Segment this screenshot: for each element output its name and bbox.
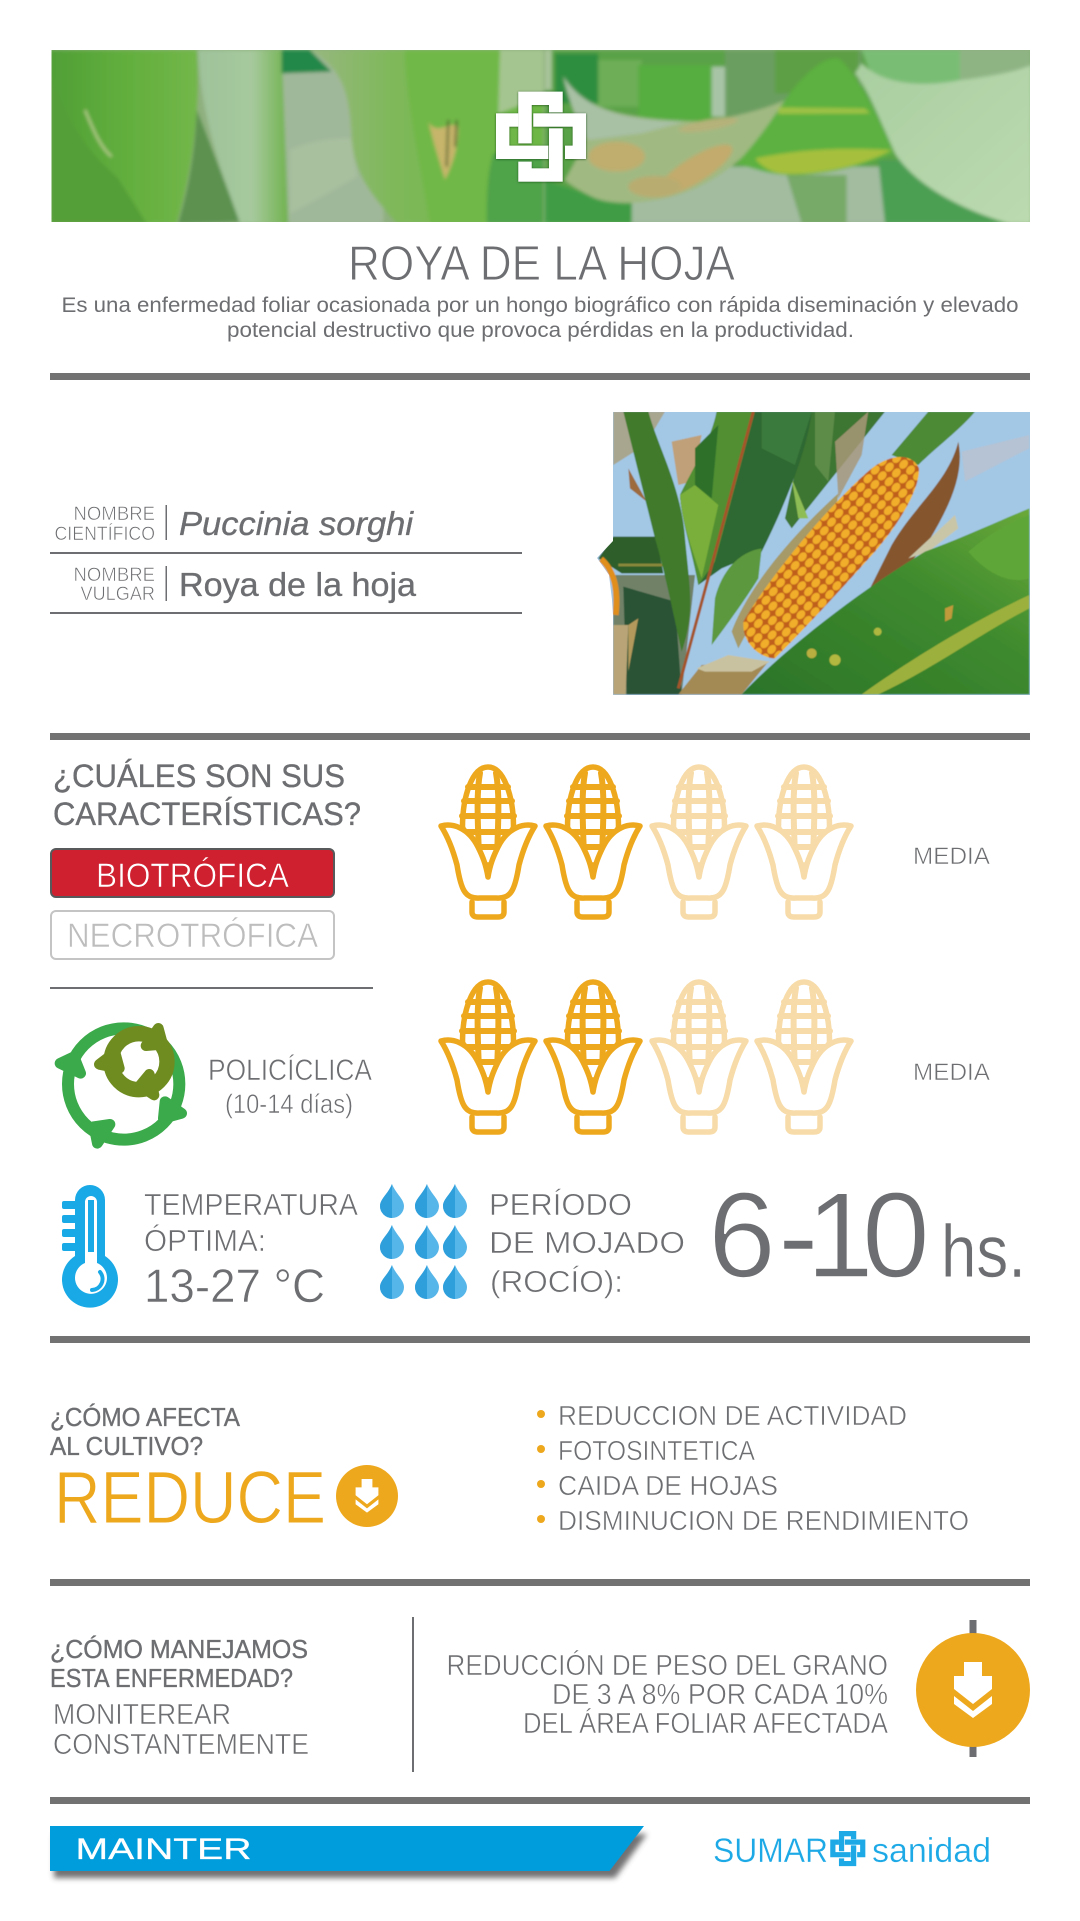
text: optimum temperature bbox=[144, 1187, 358, 1312]
logo: white interlocked knot bbox=[496, 92, 586, 182]
text: wetting period: DE MOJADO bbox=[489, 1225, 685, 1260]
tag: biotrophic (active): BIOTRÓFICA bbox=[96, 857, 289, 895]
heading: crop effect bbox=[50, 1402, 241, 1461]
heading: characteristics: CARACTERÍSTICAS? bbox=[53, 796, 361, 832]
heading: crop effect: ¿CÓMO AFECTA bbox=[50, 1402, 241, 1432]
heading: characteristics bbox=[53, 758, 361, 832]
text: grain weight loss: REDUCCIÓN DE PESO DEL GRANO bbox=[446, 1649, 888, 1682]
label: polycyclic: (10-14 días) bbox=[225, 1089, 353, 1119]
list: effects: CAIDA DE HOJAS bbox=[558, 1470, 778, 1501]
scientific name: NOMBRE bbox=[74, 504, 155, 525]
panel: characteristics bbox=[50, 758, 990, 1143]
icon: thermometer bbox=[62, 1185, 118, 1308]
footer: sumar sanidad brand bbox=[713, 1831, 991, 1870]
text: optimum temperature: TEMPERATURA bbox=[144, 1187, 358, 1222]
list: effects: DISMINUCION DE RENDIMIENTO bbox=[558, 1505, 969, 1536]
intro paragraph bbox=[62, 294, 1018, 342]
heading: management: ESTA ENFERMEDAD? bbox=[50, 1663, 293, 1693]
text: grain weight loss bbox=[446, 1649, 889, 1740]
big number: 6-10 hs: hs. bbox=[941, 1210, 1026, 1293]
intro paragraph: Es una enfermedad foliar ocasionada por un hongo biográfico con rápida diseminación y elevado bbox=[62, 294, 1018, 317]
footer: sumar sanidad brand: SUMAR bbox=[713, 1832, 828, 1870]
common name: NOMBRE bbox=[74, 565, 155, 586]
text: wetting period: (ROCÍO): bbox=[490, 1264, 623, 1299]
label: rating medium, second row: MEDIA bbox=[913, 1059, 990, 1086]
label: rating medium, first row: MEDIA bbox=[913, 843, 990, 870]
scientific name: CIENTÍFICO bbox=[54, 524, 155, 545]
icon: polycyclic cycle bbox=[60, 1028, 182, 1143]
label: polycyclic: POLICÍCLICA bbox=[208, 1054, 372, 1087]
label: polycyclic bbox=[208, 1054, 372, 1119]
heading: management bbox=[50, 1634, 308, 1693]
heading: management: ¿CÓMO MANEJAMOS bbox=[50, 1634, 308, 1664]
list: effects: FOTOSINTETICA bbox=[558, 1435, 755, 1466]
big number: 6-10 hs bbox=[708, 1167, 1026, 1303]
list: effects: REDUCCION DE ACTIVIDAD bbox=[558, 1400, 907, 1431]
panel: management bbox=[50, 1617, 1030, 1772]
icon row: corn rating, second row bbox=[441, 982, 851, 1132]
panel: crop effect bbox=[50, 1400, 969, 1539]
panel: conditions bbox=[62, 1167, 1026, 1312]
text: wetting period: PERÍODO bbox=[489, 1187, 632, 1222]
text: monitoring: CONSTANTEMENTE bbox=[53, 1729, 309, 1761]
icon row: corn rating, first row bbox=[441, 767, 851, 917]
heading: characteristics: ¿CUÁLES SON SUS bbox=[53, 758, 345, 794]
title: ROYA DE LA HOJA bbox=[348, 237, 735, 291]
tag: necrotrophic (inactive): NECROTRÓFICA bbox=[67, 917, 318, 955]
text: optimum temperature: ÓPTIMA: bbox=[144, 1223, 266, 1258]
scientific name bbox=[54, 504, 415, 545]
footer: sumar sanidad brand: sanidad bbox=[872, 1832, 991, 1870]
icon: sumar knot bbox=[830, 1831, 865, 1866]
footer: mainter ribbon: MAINTER bbox=[76, 1833, 252, 1866]
common name bbox=[74, 565, 417, 605]
big number: 6-10 hs: 6-10 bbox=[708, 1167, 930, 1303]
keyword: reduce: REDUCE bbox=[54, 1456, 326, 1539]
common name: Roya de la hoja bbox=[179, 566, 417, 603]
text: monitoring: MONITEREAR bbox=[53, 1699, 231, 1731]
photo: ripe corn cob on the plant bbox=[595, 405, 1042, 698]
list: effects bbox=[537, 1400, 969, 1536]
text: optimum temperature: 13-27 °C bbox=[144, 1259, 325, 1312]
icon: water drops bbox=[380, 1184, 467, 1299]
common name: VULGAR bbox=[80, 584, 155, 605]
icon: large down arrow circle bbox=[916, 1620, 1030, 1757]
intro paragraph: potencial destructivo que provoca pérdidas en la productividad. bbox=[227, 319, 854, 342]
scientific name: Puccinia sorghi bbox=[179, 505, 415, 542]
text: wetting period bbox=[489, 1187, 685, 1299]
heading: crop effect: AL CULTIVO? bbox=[50, 1431, 203, 1461]
text: monitoring bbox=[53, 1699, 309, 1761]
banner photo: corn leaves with rust bbox=[50, 50, 1035, 223]
icon: down arrow circle bbox=[336, 1465, 398, 1527]
tag: biotrophic (active) bbox=[51, 849, 334, 897]
panel: names bbox=[50, 504, 522, 614]
text: grain weight loss: DE 3 A 8% POR CADA 10% bbox=[552, 1679, 888, 1711]
footer: mainter ribbon bbox=[50, 1826, 647, 1878]
text: grain weight loss: DEL ÁREA FOLIAR AFECTADA bbox=[523, 1707, 889, 1740]
